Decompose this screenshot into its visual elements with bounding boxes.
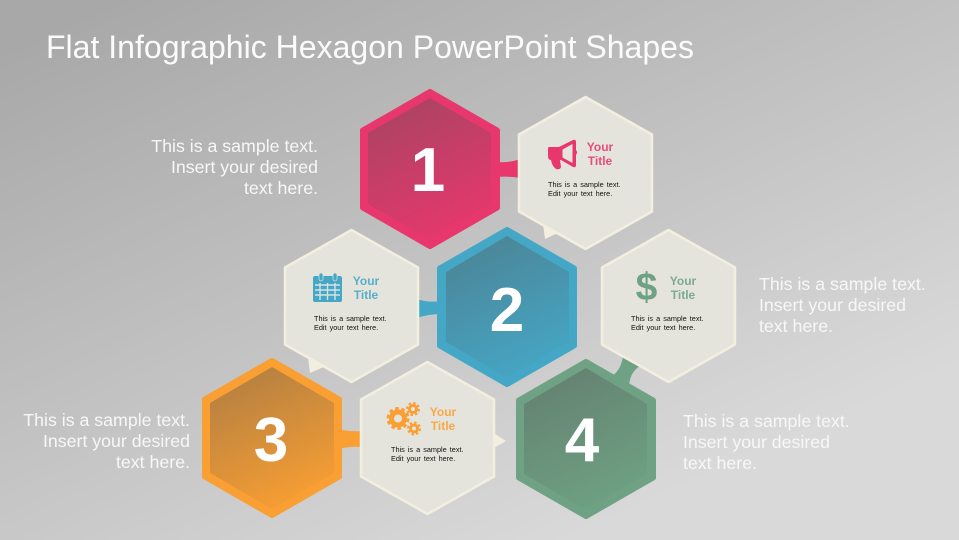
side text: item 4: Insert your desired: [683, 432, 830, 452]
card text: Edit your text here.: [548, 189, 612, 198]
side text: item 2: This is a sample text.: [759, 274, 926, 294]
card title: Your: [670, 274, 697, 288]
card text: Edit your text here.: [314, 323, 378, 332]
side text: item 2: text here.: [759, 316, 833, 336]
number 2: 2: [490, 276, 524, 345]
side text: item 1: text here.: [244, 178, 318, 198]
icon: megaphone: [548, 140, 577, 169]
icon: gears: [388, 403, 420, 434]
title: Flat Infographic Hexagon PowerPoint Shapes: [46, 29, 694, 65]
card 3: [361, 362, 494, 514]
pointer: card 3: [490, 431, 506, 450]
number 4: 4: [565, 406, 600, 475]
card title: Title: [588, 154, 613, 168]
card 4: [602, 230, 735, 382]
side text: item 3: This is a sample text.: [23, 410, 190, 430]
card text: Edit your text here.: [631, 323, 695, 332]
icon: calendar: [313, 273, 342, 302]
pointer: card 1: [543, 224, 560, 239]
number 1: 1: [411, 136, 445, 205]
side text: item 4: text here.: [683, 453, 757, 473]
card title: Title: [354, 288, 379, 302]
connector: 1: [495, 159, 520, 178]
card title: Your: [353, 274, 380, 288]
card title: Your: [430, 405, 457, 419]
hexagon 3: [205, 361, 339, 515]
connector: 4: [612, 356, 640, 386]
card text: This is a sample text.: [391, 445, 464, 454]
hexagon 1: [363, 92, 497, 246]
hexagon 2: [440, 230, 574, 384]
pointer: card 2: [308, 357, 326, 373]
side text: item 2: Insert your desired: [759, 295, 906, 315]
card text: This is a sample text.: [548, 180, 621, 189]
card title: Title: [431, 419, 456, 433]
side text: item 1: This is a sample text.: [151, 136, 318, 156]
number 3: 3: [254, 406, 288, 475]
card 1: [519, 97, 652, 249]
card title: Title: [671, 288, 696, 302]
side text: item 3: Insert your desired: [43, 431, 190, 451]
card text: This is a sample text.: [314, 314, 387, 323]
hexagon 4: [519, 362, 653, 516]
card text: This is a sample text.: [631, 314, 704, 323]
icon: dollar sign: $: [636, 266, 658, 309]
side text: item 3: text here.: [116, 452, 190, 472]
side text: item 1: Insert your desired: [171, 157, 318, 177]
card text: Edit your text here.: [391, 454, 455, 463]
side text: item 4: This is a sample text.: [683, 411, 850, 431]
card 2: [285, 230, 418, 382]
connector: 3: [338, 429, 362, 449]
connector: 2: [417, 299, 442, 318]
card title: Your: [587, 140, 614, 154]
